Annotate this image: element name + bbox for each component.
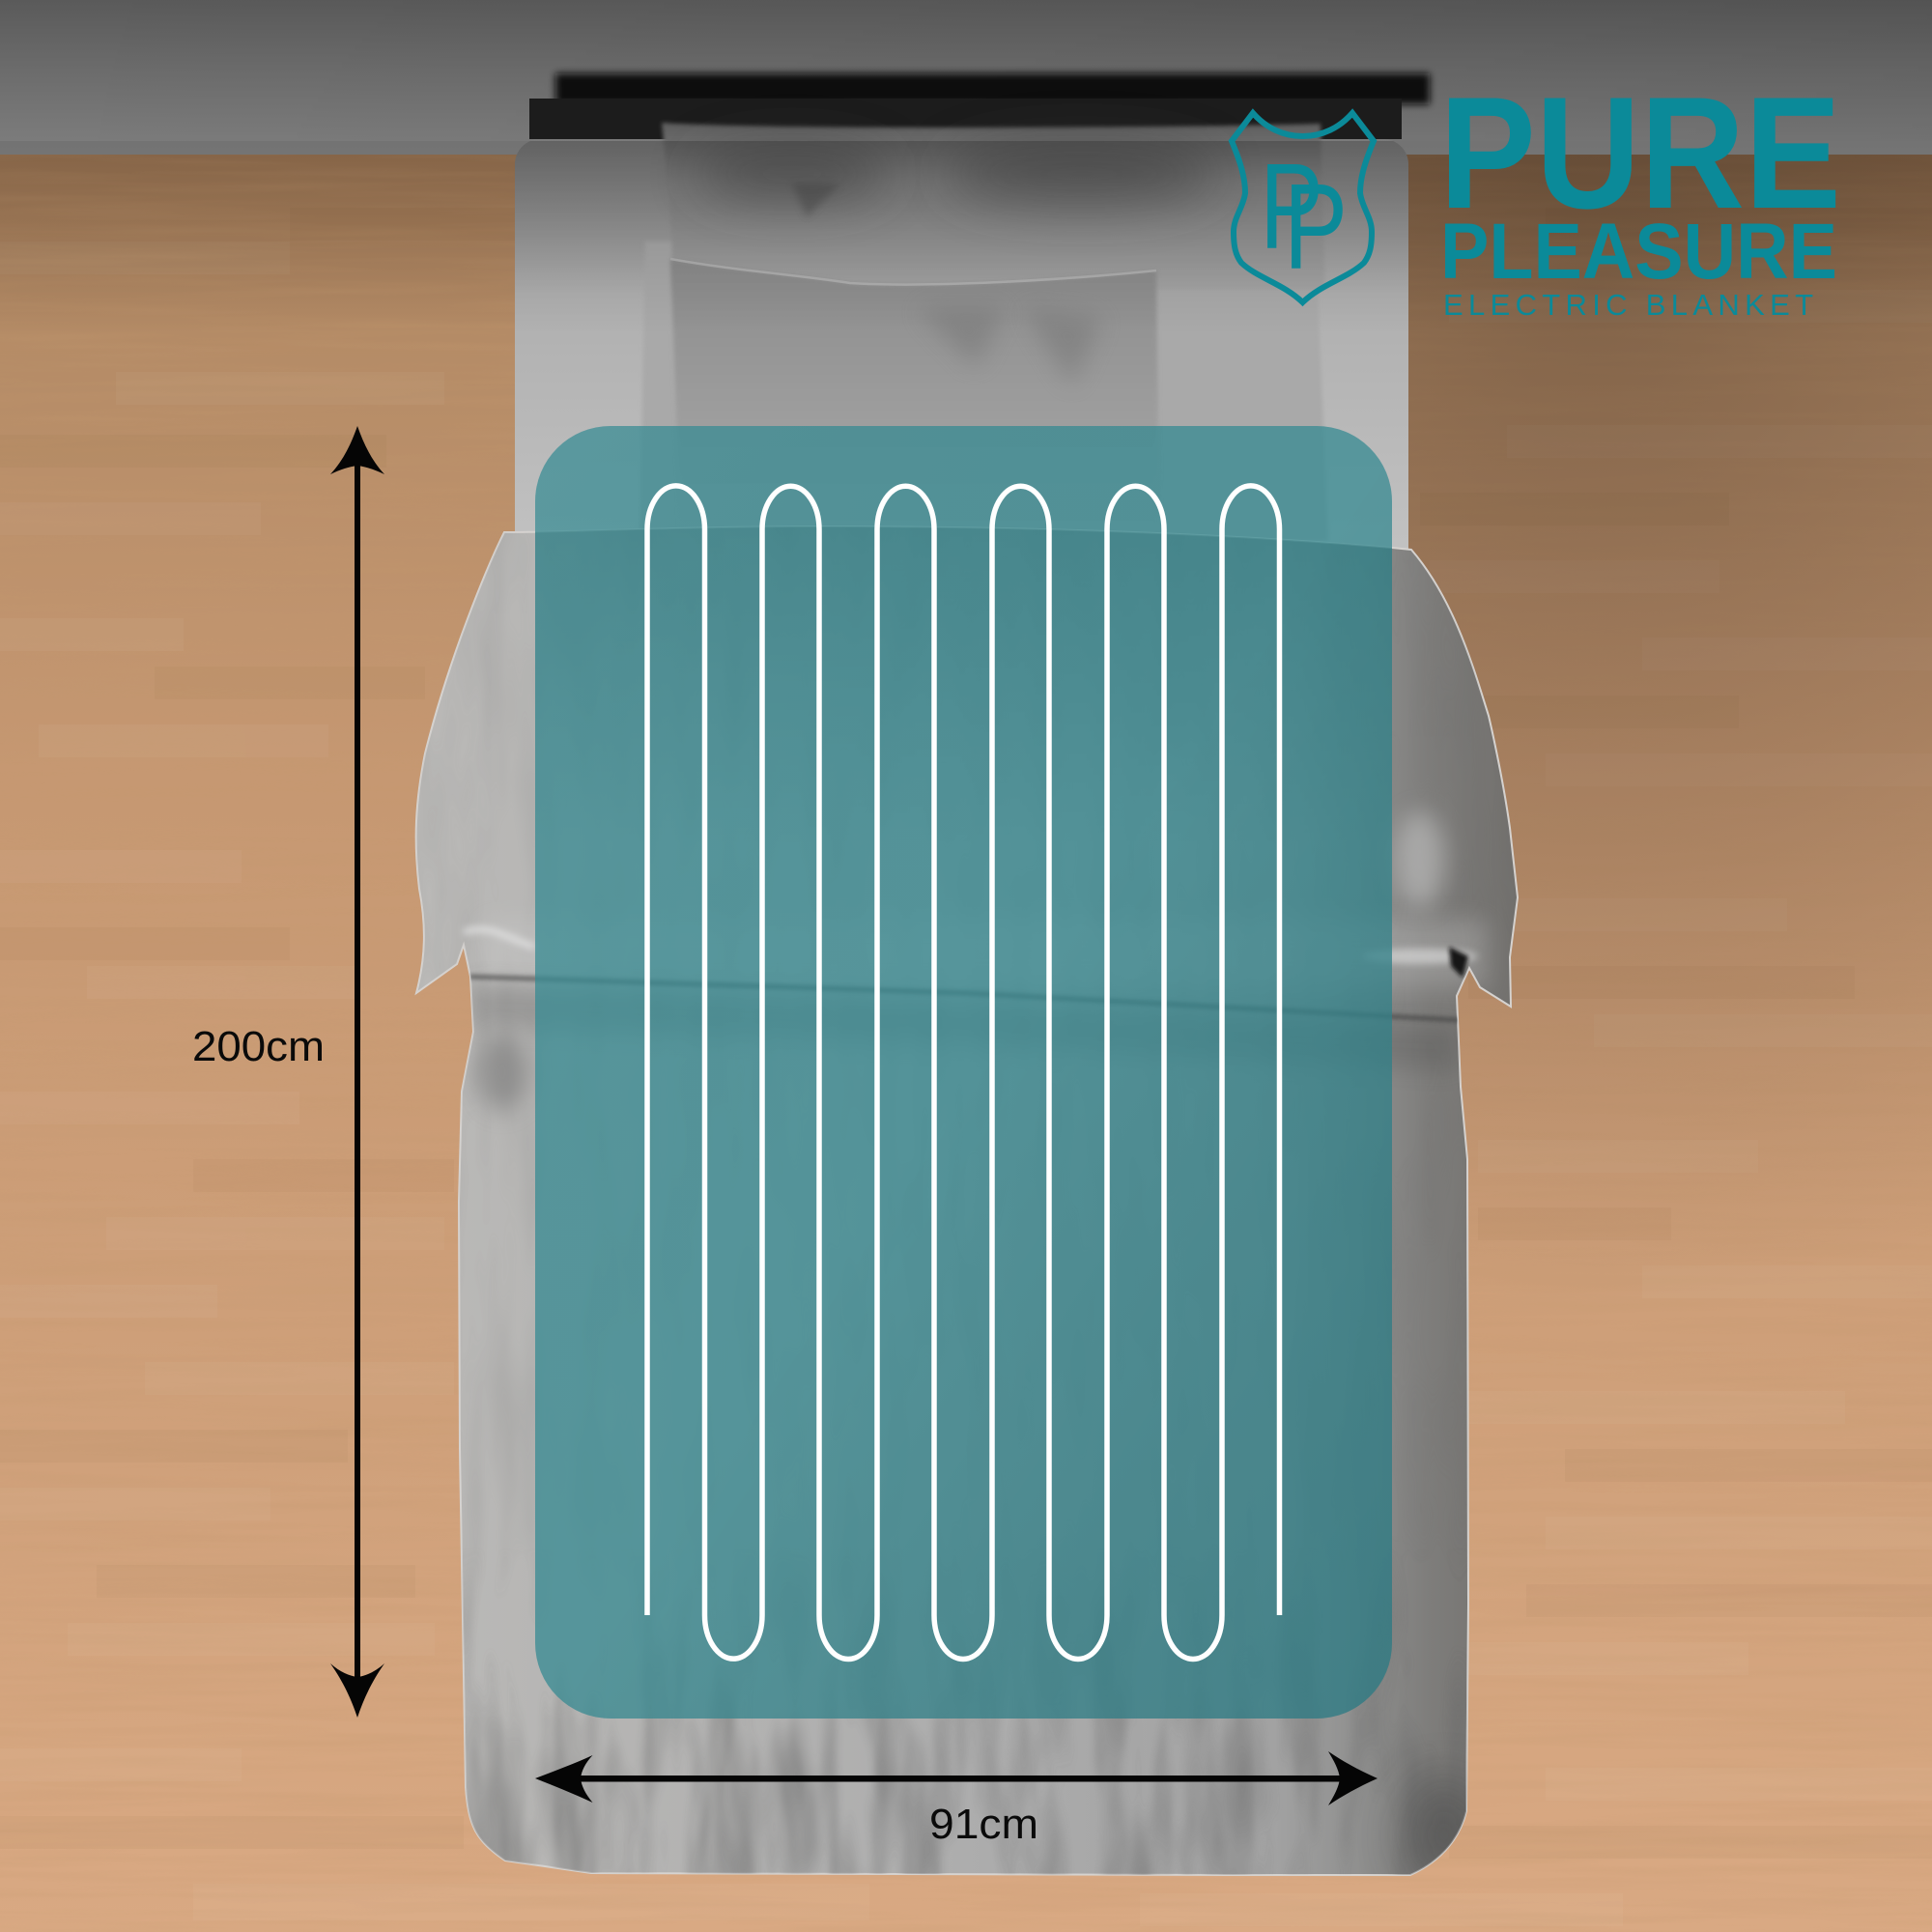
width label: 91cm	[929, 1801, 1038, 1848]
brand name line one: PURE	[1439, 64, 1841, 242]
width arrow	[535, 1751, 1378, 1805]
tagline: ELECTRIC BLANKET	[1443, 288, 1813, 322]
blanket overlay panel	[535, 426, 1392, 1719]
headboard and its shadow	[529, 73, 1430, 139]
logo	[1232, 64, 1841, 322]
icon: shield monogram: P	[1260, 138, 1323, 274]
top shading over the scene	[0, 141, 1932, 334]
height arrow	[330, 426, 384, 1718]
duvet	[406, 522, 1526, 1893]
pillows and sheet	[639, 123, 1328, 541]
wall and baseboard	[0, 0, 1932, 155]
height label: 200cm	[192, 1023, 325, 1070]
icon: shield monogram	[1232, 113, 1374, 302]
heating wire serpentine	[647, 486, 1279, 1660]
mattress	[515, 139, 1408, 583]
icon: shield monogram: P	[1284, 158, 1348, 295]
brand name line two: PLEASURE	[1440, 208, 1837, 296]
bed with pillows and duvet	[406, 123, 1526, 1893]
